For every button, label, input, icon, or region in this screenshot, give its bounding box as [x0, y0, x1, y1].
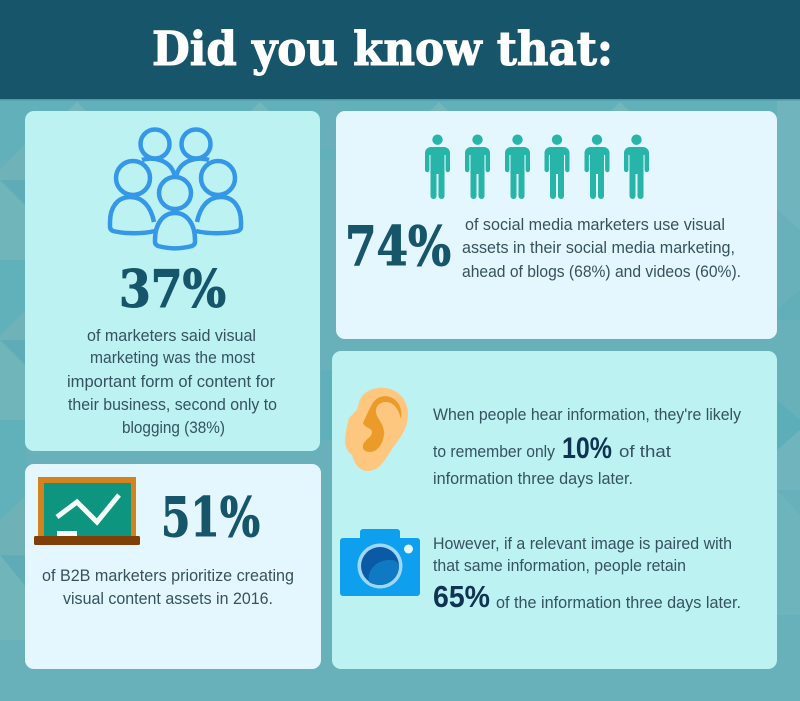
- panel: memory retention: [332, 351, 777, 669]
- stat: 74%: 74%: [345, 214, 451, 278]
- text: 37 percent description: marketing was the most: [90, 348, 255, 367]
- stat: 37%: 37%: [119, 260, 226, 320]
- icon: chalkboard: [34, 477, 140, 545]
- text: image statement: of the information three days later.: [496, 593, 741, 612]
- text: image statement: However, if a relevant image is paired with: [433, 534, 732, 553]
- text: 37 percent description: their business, second only to: [68, 395, 277, 414]
- icon: row of six people: [425, 134, 649, 199]
- icon: group of people: [110, 130, 241, 248]
- text: hearing statement: of that: [619, 442, 671, 461]
- header band: [0, 0, 800, 100]
- text: 37 percent description: important form of content for: [67, 372, 275, 391]
- text: 74 percent description: [462, 215, 741, 281]
- text: 74 percent description: of social media marketers use visual: [465, 215, 725, 234]
- text: 37 percent description: [67, 326, 277, 437]
- text: image statement: [433, 534, 741, 614]
- text: 51 percent description: of B2B marketers prioritize creating: [42, 566, 294, 585]
- title: Did you know that:: [152, 22, 613, 77]
- panel: 37 percent: [25, 111, 320, 451]
- text: 51 percent description: [42, 566, 294, 608]
- text: hearing statement: 10%: [562, 432, 612, 465]
- icon: camera: [340, 529, 420, 596]
- text: 37 percent description: of marketers said visual: [87, 326, 256, 345]
- text: 37 percent description: blogging (38%): [122, 418, 225, 437]
- text: image statement: that same information, people retain: [433, 556, 686, 575]
- icon: ear: [345, 388, 408, 471]
- stat: 51%: 51%: [161, 485, 260, 549]
- panel: 51 percent: [25, 464, 321, 669]
- text: hearing statement: When people hear information, they're likely: [433, 405, 741, 424]
- text: image statement: 65%: [433, 579, 490, 614]
- text: hearing statement: information three days later.: [433, 469, 633, 488]
- text: 51 percent description: visual content assets in 2016.: [63, 589, 273, 608]
- text: hearing statement: to remember only: [433, 442, 555, 461]
- panel: 74 percent: [336, 111, 777, 339]
- text: 74 percent description: ahead of blogs (68%) and videos (60%).: [462, 262, 741, 281]
- text: 74 percent description: assets in their social media marketing,: [462, 238, 735, 257]
- text: hearing statement: [433, 405, 741, 488]
